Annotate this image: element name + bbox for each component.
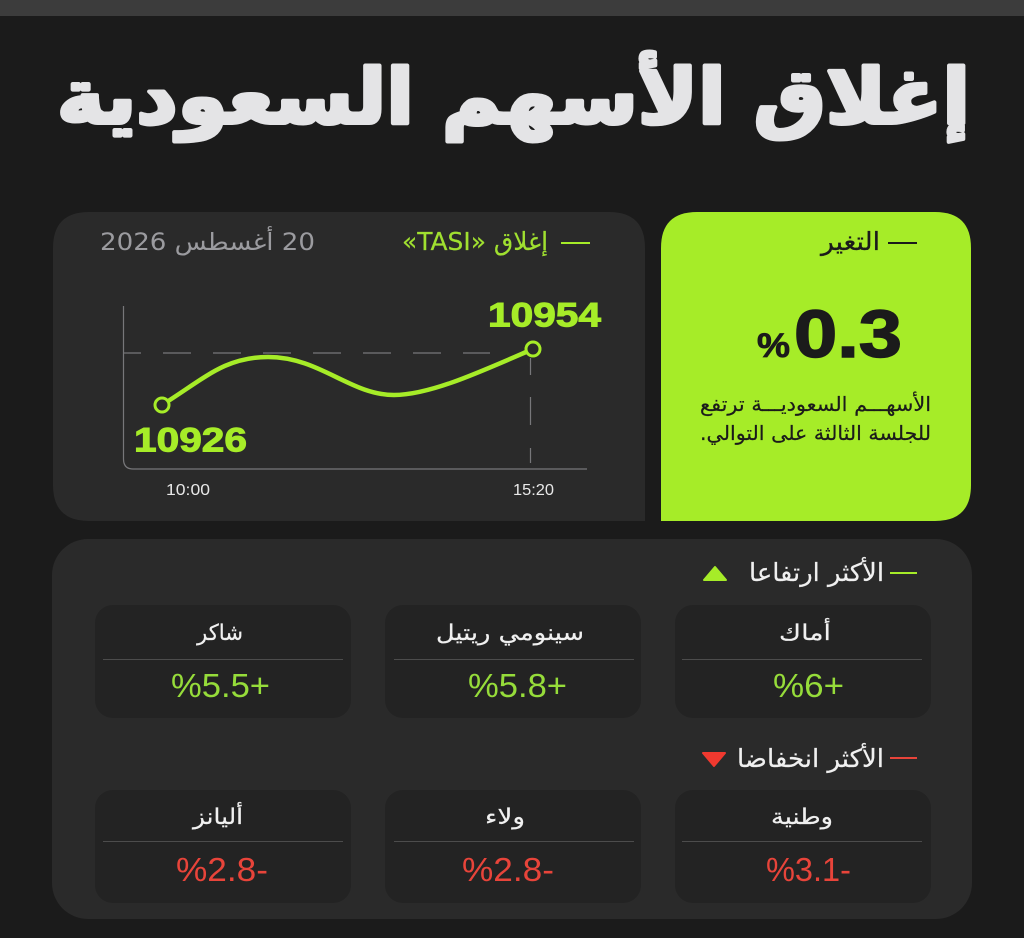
chart heading: إغلاق «TASI» — [402, 227, 548, 257]
change description: للجلسة الثالثة على التوالي. — [700, 421, 931, 446]
panel: chart — [53, 212, 645, 521]
card: Walaa — [385, 790, 641, 903]
card: Amak: أماك — [779, 618, 831, 646]
change description — [700, 392, 931, 446]
card: Shaker: %5.5+ — [171, 667, 270, 704]
change heading: التغير — [819, 227, 880, 256]
card: Shaker: شاكر — [196, 621, 243, 646]
card: Wataniya: %3.1- — [766, 851, 851, 888]
card: Amak: %6+ — [773, 667, 844, 704]
heading: top gainers: الأكثر ارتفاعا — [749, 556, 884, 587]
start value: 10926 — [134, 422, 247, 460]
icon: down triangle — [703, 753, 725, 766]
card: Cenomi Retail — [385, 605, 641, 718]
top bar — [0, 0, 1024, 16]
card: Walaa: %2.8- — [462, 851, 554, 888]
card: Allianz — [95, 790, 351, 903]
card: Allianz: %2.8- — [176, 851, 268, 888]
card: Cenomi Retail: %5.8+ — [468, 667, 567, 704]
card: Allianz: أليانز — [192, 802, 243, 830]
panel: change — [661, 212, 971, 521]
change description: الأسهـــم السعوديـــة ترتفع — [700, 392, 931, 416]
heading: top gainers — [704, 556, 917, 587]
card: Amak — [675, 605, 931, 718]
change value — [757, 297, 902, 372]
start time: 10:00 — [166, 482, 210, 499]
icon: up triangle — [704, 567, 726, 580]
change heading — [819, 227, 917, 256]
card: Shaker — [95, 605, 351, 718]
heading: top losers — [703, 742, 917, 773]
change value: 0.3 — [794, 297, 902, 372]
end value: 10954 — [488, 296, 601, 334]
date: 20 أغسطس 2026 — [100, 226, 315, 256]
end time: 15:20 — [513, 482, 554, 499]
heading: top losers: الأكثر انخفاضا — [737, 742, 884, 773]
card: Cenomi Retail: سينومي ريتيل — [436, 621, 584, 646]
card: Wataniya: وطنية — [771, 805, 833, 830]
line chart — [124, 296, 601, 499]
title: إغلاق الأسهم السعودية — [57, 51, 970, 142]
card: Wataniya — [675, 790, 931, 903]
change value: % — [757, 327, 790, 365]
card: Walaa: ولاء — [485, 805, 525, 830]
panel: movers — [52, 539, 972, 919]
